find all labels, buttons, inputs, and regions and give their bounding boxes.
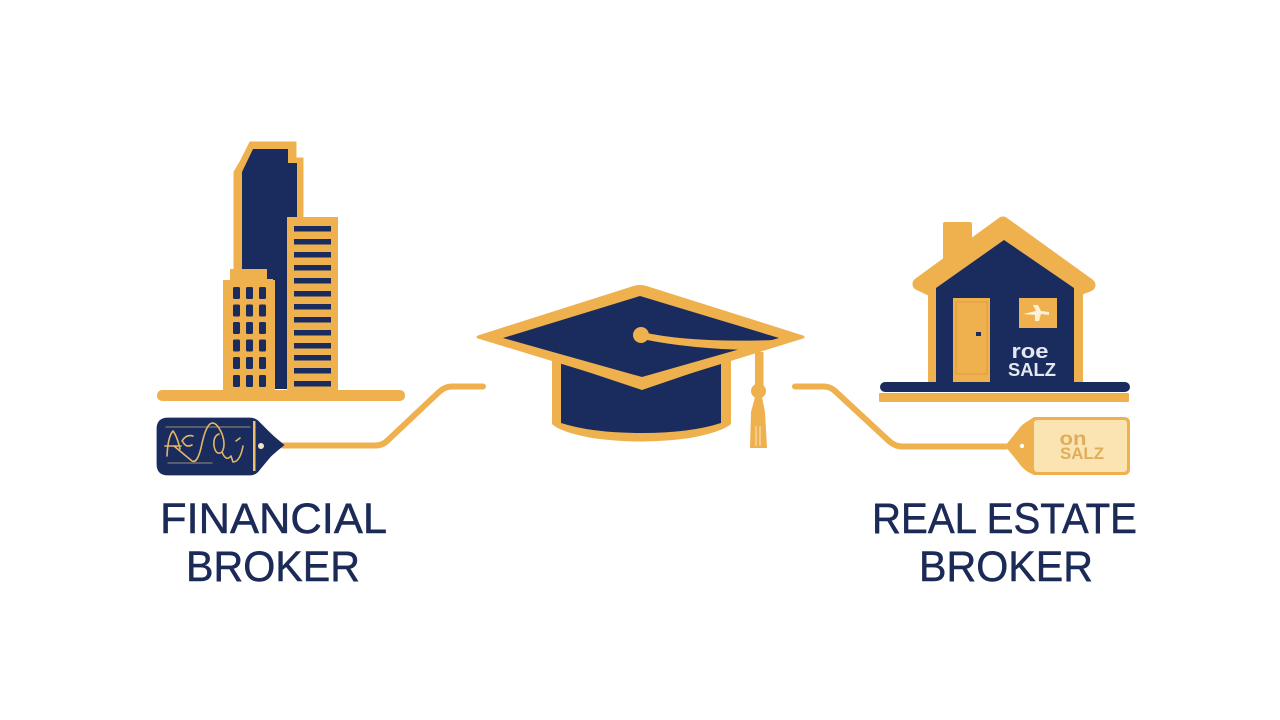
- house body: [936, 240, 1074, 383]
- label: real estate broker: BROKER: [919, 543, 1093, 591]
- right building with horizontal windows: [287, 217, 338, 390]
- for sale text on house: [1008, 341, 1056, 380]
- walls: [928, 280, 1083, 384]
- connector: financial tag to graduation cap: [283, 386, 483, 446]
- cap base: [552, 360, 731, 442]
- label: financial broker: FINANCIAL: [160, 495, 387, 543]
- tag label: [1060, 429, 1104, 463]
- for sale text on house: SALZ: [1008, 360, 1056, 380]
- door: [953, 298, 990, 382]
- chimney: [943, 222, 972, 270]
- tassel: [750, 352, 767, 448]
- icon: graduation cap: [478, 286, 803, 448]
- tag label: SALZ: [1060, 444, 1104, 463]
- label: financial broker: [160, 495, 387, 591]
- icon: financial district buildings: [157, 142, 405, 401]
- mortarboard: [478, 286, 803, 386]
- tag label: on: [1060, 429, 1086, 450]
- tall tower: [234, 142, 303, 389]
- left building with grid windows: [223, 269, 275, 390]
- window with sign: [1019, 298, 1057, 328]
- ground line under buildings: [157, 390, 405, 401]
- gold ground: [879, 393, 1129, 402]
- icon: house: [879, 222, 1130, 402]
- cord and button: [642, 332, 775, 350]
- label: financial broker: BROKER: [186, 543, 360, 591]
- connector: graduation cap to real estate tag: [795, 386, 1006, 446]
- for sale text on house: roe: [1012, 341, 1048, 363]
- navy ground: [880, 382, 1130, 392]
- icon: real estate price tag: [1005, 417, 1130, 475]
- icon: financial price tag: [157, 418, 284, 475]
- label: real estate broker: REAL ESTATE: [872, 495, 1137, 543]
- roof: [919, 223, 1089, 291]
- label: real estate broker: [872, 495, 1137, 591]
